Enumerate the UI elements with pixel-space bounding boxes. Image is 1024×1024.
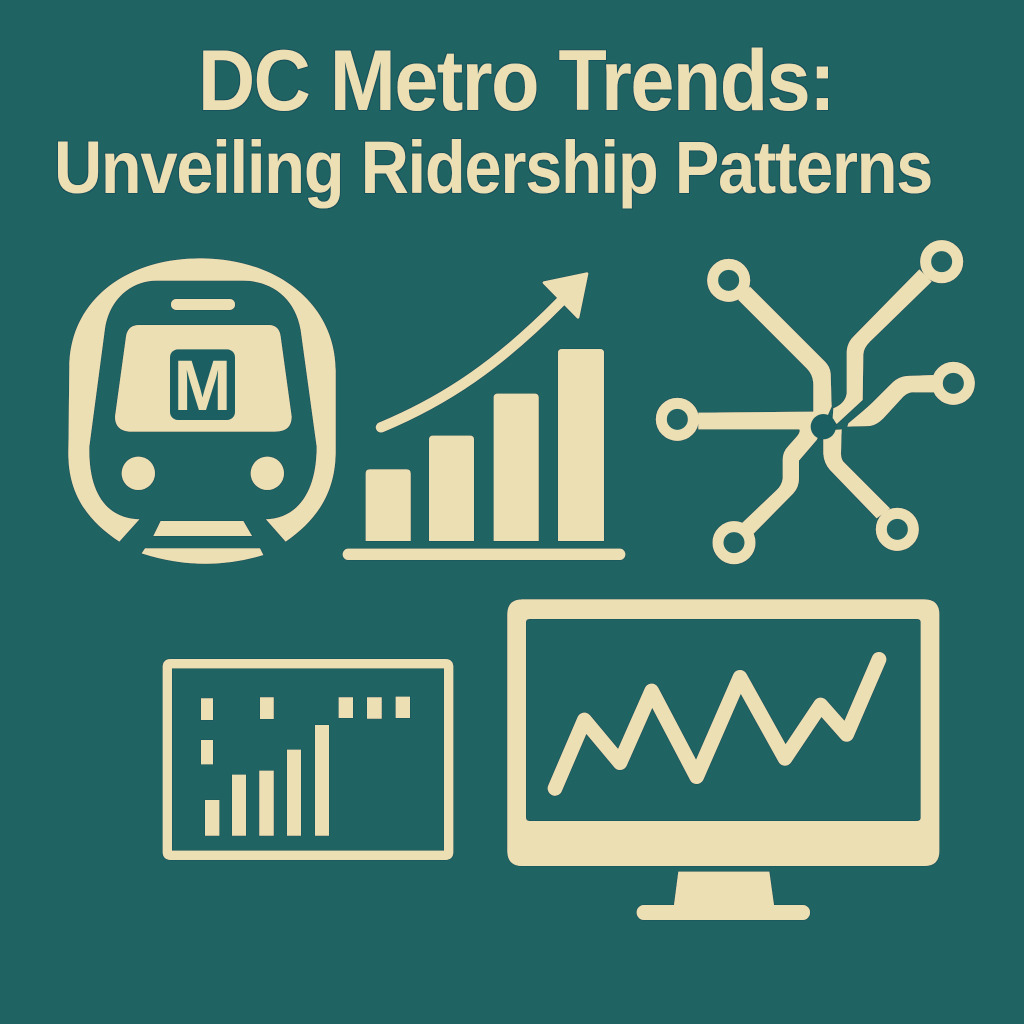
bottom-right line (823, 429, 890, 518)
dashboard frame (163, 659, 453, 860)
bar 4 (558, 349, 604, 541)
icon: computer monitor with line chart (507, 599, 939, 920)
joined lines: top-left, left, bottom-left (698, 287, 832, 534)
title (54, 32, 933, 209)
monitor body (507, 599, 939, 866)
icon: rising bar chart with arrow (343, 274, 625, 560)
station bottom-left (718, 527, 750, 559)
upper track step (153, 521, 252, 536)
bar 1 (366, 469, 411, 541)
right headlight (251, 457, 284, 490)
station top-left (713, 264, 745, 296)
top-right line (833, 269, 932, 424)
station right (937, 367, 969, 399)
icon: metro train front (68, 258, 336, 564)
growth arrow (381, 274, 587, 427)
icon: metro network map (661, 246, 969, 559)
monitor stand (674, 872, 774, 905)
title line 2: Unveiling Ridership Patterns (54, 126, 933, 209)
station bottom-right (881, 513, 913, 545)
lower track step (142, 548, 263, 564)
left headlight (122, 457, 155, 490)
panel: small dashboard (163, 659, 453, 860)
title line 1: DC Metro Trends: (198, 32, 836, 129)
dashboard bars (205, 725, 329, 836)
line chart on screen (555, 659, 879, 788)
chart baseline (343, 549, 625, 560)
monitor base (637, 905, 810, 920)
indicator squares (201, 697, 410, 764)
right line (847, 375, 934, 427)
station top-right (926, 246, 958, 278)
train outer body arc (68, 258, 336, 542)
bar 2 (429, 436, 474, 541)
bar 3 (494, 394, 539, 541)
destination sign pill (171, 299, 235, 310)
central hub (811, 414, 836, 439)
train windshield with M badge: M (174, 346, 231, 426)
station left (661, 403, 693, 435)
train windshield with M badge (115, 325, 292, 432)
